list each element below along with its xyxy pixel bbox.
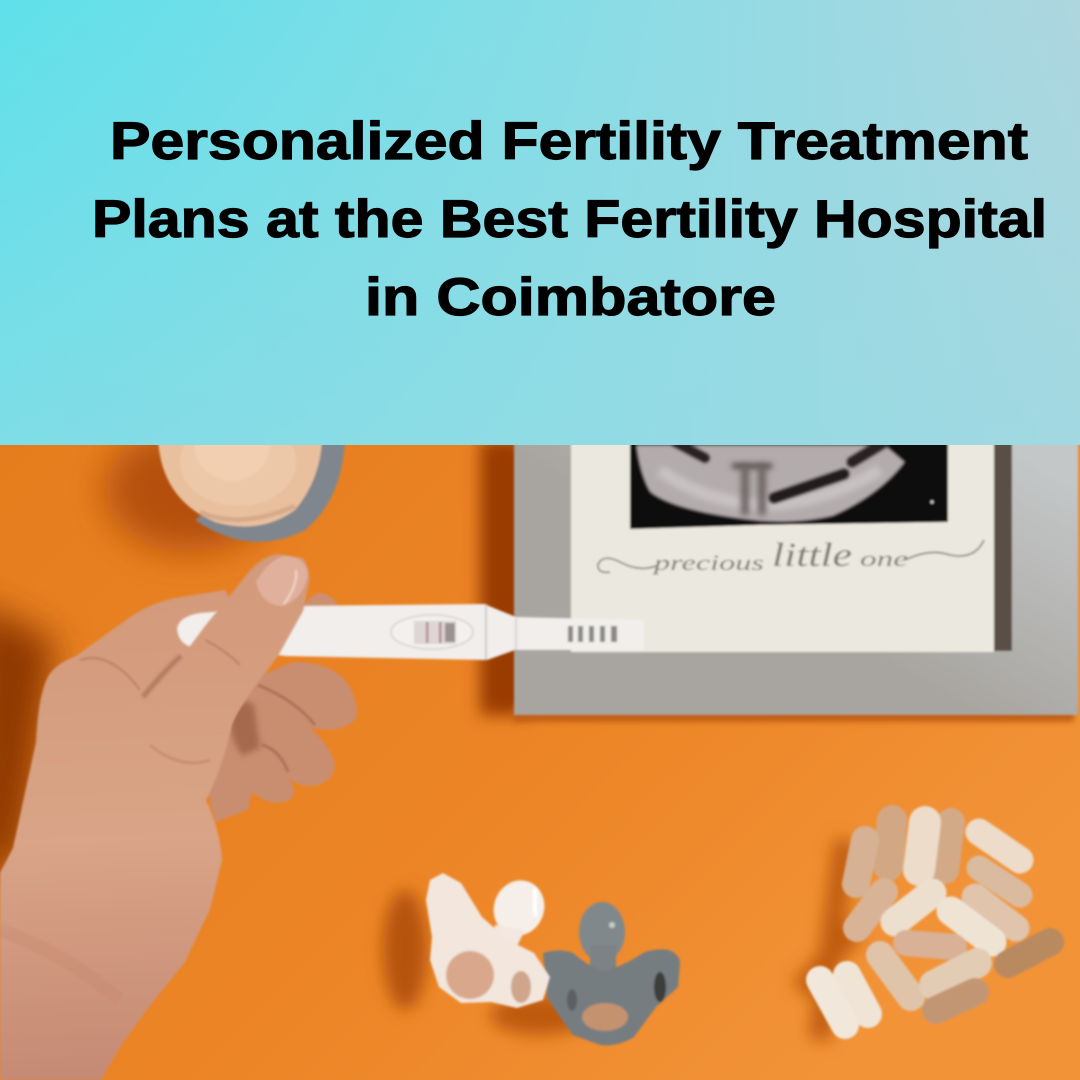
caption: precious little one: little: [772, 537, 852, 574]
result window: [391, 615, 473, 649]
caption: precious little one: one: [860, 546, 908, 571]
index fingertip behind stick: [300, 593, 338, 610]
capsule shadows: [800, 840, 855, 1040]
test stick: [177, 604, 644, 660]
icon: grey pacifier: [543, 902, 680, 1045]
bottle cast shadow: [105, 428, 275, 552]
caption: precious little one: [598, 537, 984, 575]
title: Personalized Fertility Treatment: [110, 112, 1028, 171]
hand palm: [0, 590, 260, 1080]
thumb nail: [256, 556, 308, 606]
stick handle: [177, 604, 644, 660]
hand back fingers: [205, 593, 357, 822]
title: in Coimbatore: [365, 268, 776, 327]
header band: [0, 0, 1080, 445]
ultrasound image: [630, 440, 948, 529]
icon: white pacifier: [426, 873, 552, 1008]
icon: bottle cap top: [158, 409, 345, 542]
icon: capsules pile: [820, 820, 1050, 1025]
thumb: [143, 554, 309, 732]
barcode bars: [568, 626, 617, 642]
mat board: [571, 440, 994, 652]
caption: precious little one: precious: [651, 550, 764, 575]
pacifier shadows: [383, 890, 427, 1010]
picture frame with ultrasound: [514, 440, 1078, 715]
skin creases: [143, 656, 181, 697]
hand cast shadow: [0, 600, 55, 900]
title: Plans at the Best Fertility Hospital: [92, 190, 1047, 249]
frame cast shadow: [480, 440, 530, 715]
title: [92, 112, 1047, 327]
photo: orange flat lay: [0, 409, 1080, 1080]
